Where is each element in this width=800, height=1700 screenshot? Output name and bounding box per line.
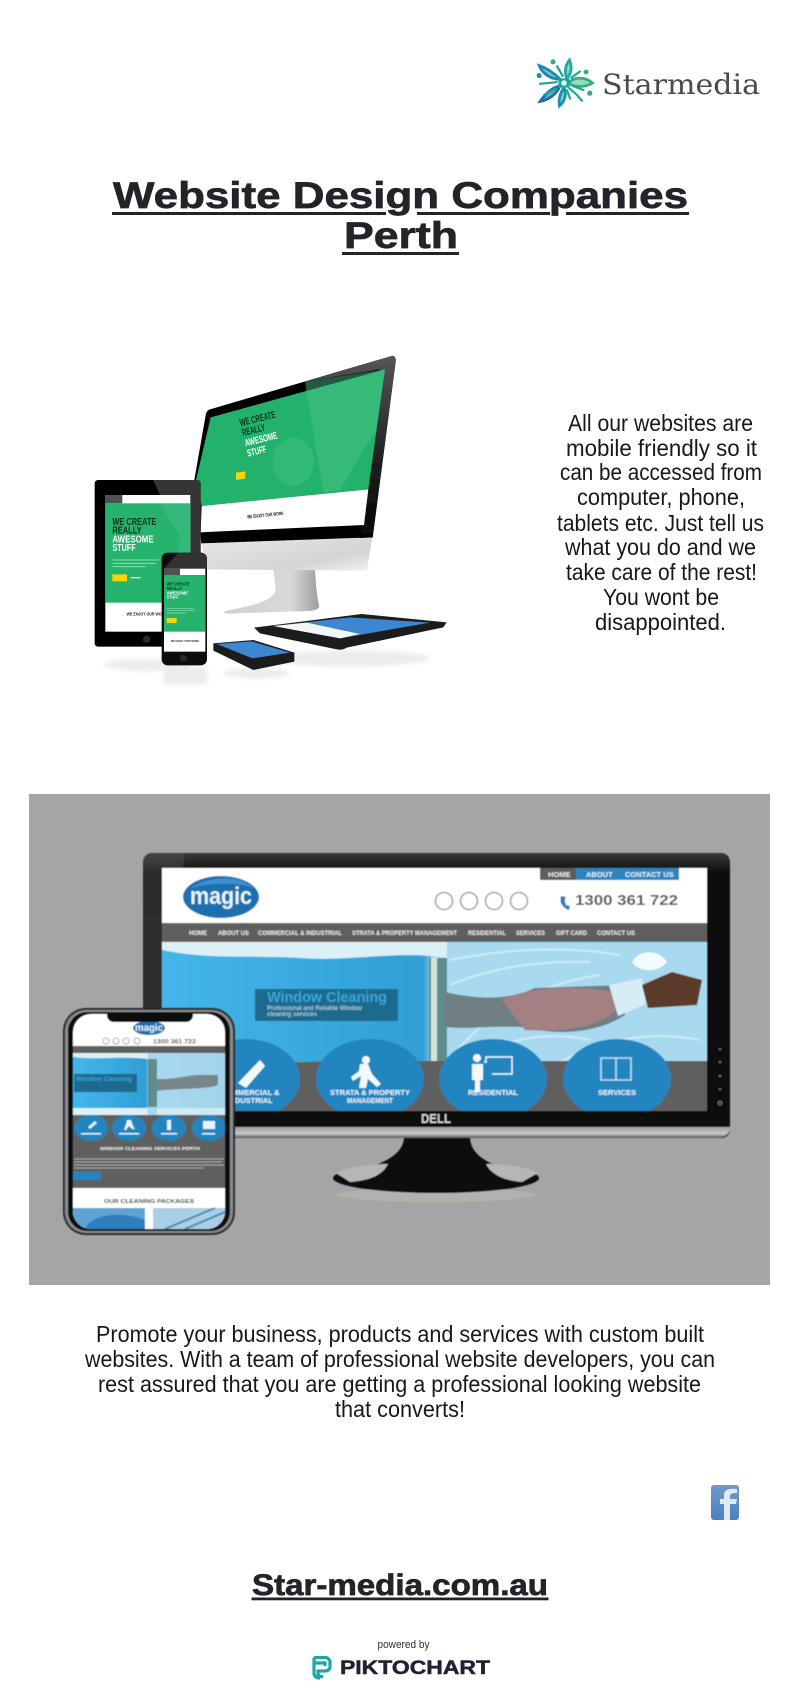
website on screen: COMMERCIAL & INDUSTRIAL	[258, 930, 342, 937]
screen green	[196, 369, 385, 506]
tablet flat	[254, 614, 447, 650]
phone mockup	[63, 1008, 235, 1235]
hero text: AWESOME	[244, 431, 279, 449]
phone mockup: magic	[135, 1023, 163, 1034]
tablet upright: STUFF	[112, 543, 136, 554]
grey band	[278, 1060, 708, 1112]
brand: DELL	[421, 1111, 451, 1126]
service labels: STRATA & PROPERTY	[330, 1088, 410, 1097]
service circles	[234, 1038, 672, 1112]
hero text: REALLY	[241, 423, 267, 439]
arm and hand	[445, 985, 625, 1032]
phone flat	[213, 640, 294, 670]
phone upright: AWESOME	[167, 590, 189, 596]
tablet upright: WE ENJOY OUR WO	[127, 612, 162, 618]
paragraph: promote your business: Promote your business, products and services with custom built	[96, 1321, 705, 1347]
website on screen: Window Cleaning	[267, 990, 387, 1006]
hero photo	[161, 950, 446, 1064]
side buttons	[718, 1048, 722, 1105]
hero text: WE CREATE	[239, 410, 277, 429]
website on screen: CONTACT US	[597, 930, 636, 937]
top tabs: ABOUT	[586, 870, 613, 879]
footer: powered by Piktochart: powered by	[378, 1639, 430, 1651]
paragraph: promote your business: that converts!	[335, 1396, 465, 1422]
illustration: responsive devices	[95, 356, 447, 685]
icon: Piktochart mark	[314, 1658, 330, 1678]
top tabs: HOME	[548, 870, 570, 879]
paragraph: promote your business	[84, 1321, 715, 1422]
top tabs: CONTACT US	[625, 870, 674, 879]
bezel	[194, 356, 396, 543]
text box	[255, 989, 398, 1021]
website on screen: ABOUT US	[218, 930, 250, 937]
service labels: RESIDENTIAL	[468, 1088, 518, 1097]
tablet upright: AWESOME	[112, 534, 154, 545]
phone upright: WE CREATE	[167, 582, 190, 588]
footer: powered by Piktochart	[314, 1639, 490, 1679]
desktop monitor: WE ENJOY OUR WORK	[247, 511, 284, 521]
magic logo	[183, 876, 259, 918]
phone upright: REALLY	[167, 586, 183, 592]
phone mockup: 1300 361 722	[153, 1038, 196, 1046]
title: Website Design Companies	[113, 175, 688, 216]
icon: star flower	[538, 60, 593, 106]
paragraph: mobile friendly: take care of the rest!	[566, 559, 757, 585]
top tabs	[540, 868, 679, 880]
phone mockup: WINDOW CLEANING SERVICES PERTH	[100, 1146, 201, 1152]
paragraph: promote your business: rest assured that you are getting a professional looking website	[98, 1371, 701, 1397]
hero text	[239, 410, 285, 460]
title	[112, 175, 689, 256]
paragraph: mobile friendly: mobile friendly so it	[566, 435, 758, 461]
website on screen: GIFT CARD	[556, 930, 587, 937]
title: Perth	[344, 215, 458, 256]
service labels	[234, 1089, 636, 1104]
phone mockup: OUR CLEANING PACKAGES	[104, 1199, 194, 1205]
screen white	[201, 489, 368, 532]
paragraph: mobile friendly: All our websites are	[568, 410, 753, 436]
paragraph: mobile friendly: disappointed.	[595, 609, 726, 635]
logo: Starmedia	[538, 60, 760, 106]
phone notch	[107, 1013, 193, 1022]
website on screen: magic	[190, 883, 252, 910]
website on screen: cleaning services	[267, 1012, 317, 1018]
wordmark: Starmedia	[602, 68, 760, 101]
paragraph: promote your business: websites. With a team of professional website developers, you can	[84, 1346, 715, 1372]
squeegee	[429, 958, 447, 1061]
service labels: SERVICES	[598, 1088, 636, 1097]
nav bar	[162, 923, 707, 942]
website link: Star-media.com.au	[252, 1569, 548, 1602]
icon: facebook	[711, 1485, 739, 1520]
website on screen: Professional and Reliable Window	[267, 1006, 363, 1012]
website on screen: 1300 361 722	[575, 892, 678, 909]
website on screen: STRATA & PROPERTY MANAGEMENT	[352, 930, 457, 937]
paragraph: mobile friendly: can be accessed from	[560, 459, 762, 485]
hero text: STUFF	[246, 444, 268, 460]
phone hero	[73, 1053, 225, 1115]
website on screen: HOME	[189, 930, 208, 937]
phone number	[560, 896, 570, 910]
website on screen	[162, 868, 707, 1119]
service labels: COMMERCIAL &	[220, 1088, 280, 1097]
cuff and wrist	[609, 978, 646, 1016]
stand	[224, 570, 319, 614]
panel: website mockup on grey	[29, 794, 770, 1285]
website on screen: RESIDENTIAL	[468, 930, 506, 937]
paragraph: mobile friendly	[557, 410, 764, 635]
phone upright: STUFF	[167, 595, 179, 601]
social icons	[436, 892, 528, 910]
tablet upright	[95, 480, 201, 647]
website on screen: SERVICES	[516, 930, 546, 937]
monitor stand	[370, 1137, 500, 1167]
service labels: MANAGEMENT	[347, 1096, 393, 1105]
phone upright	[162, 553, 207, 665]
service labels: INDUSTRIAL	[227, 1096, 273, 1105]
wordmark: PIKTOCHART	[340, 1658, 490, 1679]
reflections	[103, 650, 430, 685]
phone body	[73, 1115, 225, 1188]
phone logo	[133, 1021, 165, 1035]
tablet upright: WE CREATE	[112, 517, 157, 528]
service icons	[238, 1060, 265, 1088]
desktop monitor	[194, 356, 396, 614]
monitor bezel	[143, 853, 730, 1138]
paragraph: mobile friendly: computer, phone,	[577, 484, 745, 510]
phone mockup: Window Cleaning	[76, 1076, 132, 1083]
desktop monitor	[143, 853, 730, 1202]
paragraph: mobile friendly: tablets etc. Just tell us	[557, 510, 764, 536]
paragraph: mobile friendly: You wont be	[603, 584, 719, 610]
phone upright: WE ENJOY YOUR WORK	[171, 639, 200, 643]
chin	[201, 535, 373, 571]
paragraph: mobile friendly: what you do and we	[564, 534, 756, 560]
tablet upright: REALLY	[112, 526, 142, 537]
